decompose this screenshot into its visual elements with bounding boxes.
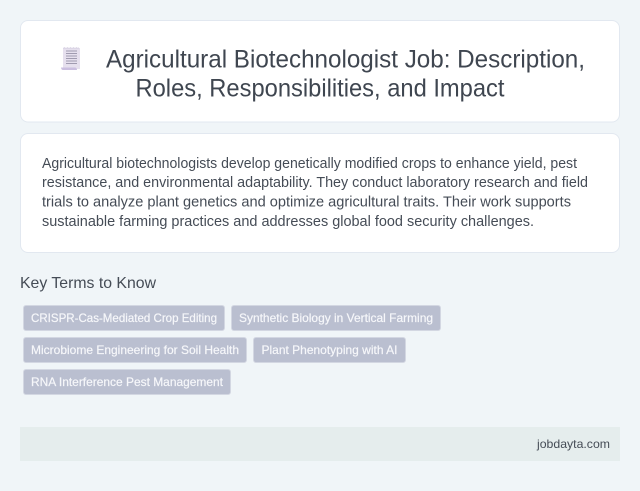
tag: microbiome: [24, 338, 246, 362]
text block: description: resistance, and environmental adaptability. They conduct laboratory research and field: [42, 175, 588, 191]
icon: document scroll: [61, 47, 80, 70]
text block: description: [42, 156, 588, 230]
panel: title card: [20, 20, 620, 122]
tag: synthetic biology: Synthetic Biology in Vertical Farming: [239, 311, 433, 325]
tag: phenotyping: [254, 338, 406, 362]
tag: CRISPR: [24, 306, 224, 330]
tag: RNA interference: [24, 370, 230, 394]
title: Roles, Responsibilities, and Impact: [136, 74, 505, 102]
text block: description: sustainable farming practices and addresses global food security challenges.: [42, 214, 534, 230]
footer: [20, 427, 620, 461]
tag: microbiome: Microbiome Engineering for Soil Health: [31, 343, 239, 357]
tag group: key terms: [24, 306, 440, 394]
footer: jobdayta.com: [536, 437, 610, 451]
heading: key terms: Key Terms to Know: [20, 275, 156, 292]
tag: CRISPR: CRISPR-Cas-Mediated Crop Editing: [31, 311, 217, 325]
title: Agricultural Biotechnologist Job: Description,: [106, 46, 585, 74]
panel: description: [20, 134, 620, 252]
tag: synthetic biology: [232, 306, 440, 330]
text block: description: trials to analyze plant genetics and optimize agricultural traits. Their work supports: [42, 194, 571, 210]
text block: description: Agricultural biotechnologists develop genetically modified crops to enhance yield, pest: [42, 156, 577, 172]
title: [106, 46, 585, 102]
tag: RNA interference: RNA Interference Pest Management: [31, 375, 224, 389]
tag: phenotyping: Plant Phenotyping with AI: [262, 343, 398, 357]
